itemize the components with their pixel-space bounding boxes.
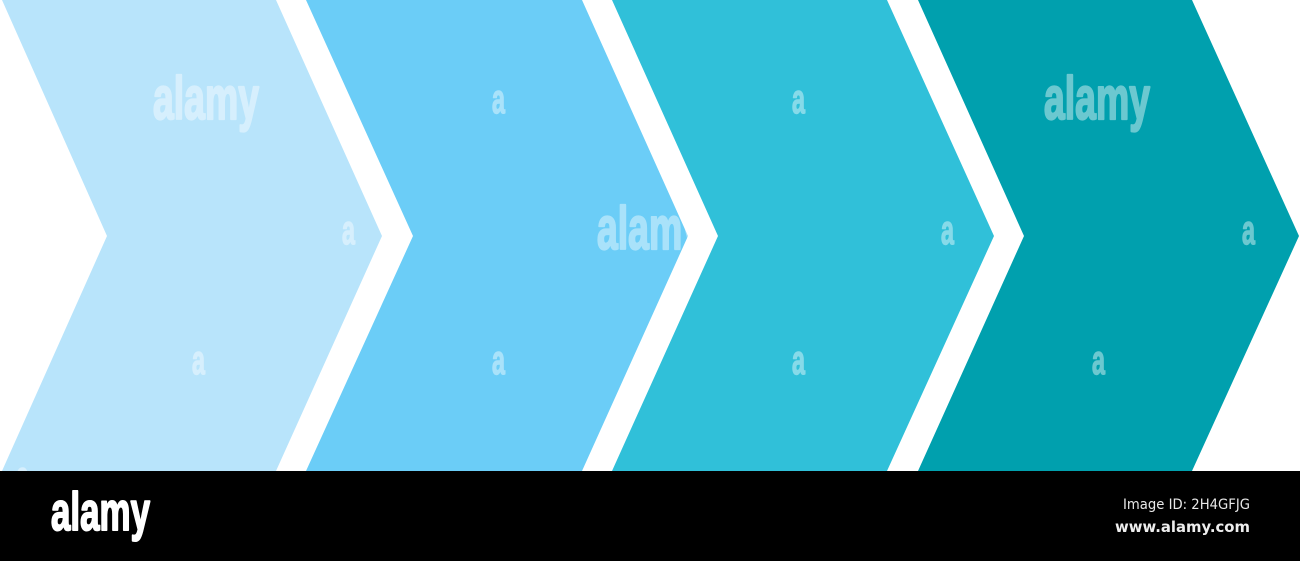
- watermark: small a, row 3: [192, 351, 1106, 376]
- watermark: small a, row 2: a: [941, 207, 955, 253]
- watermark: small a, row 2: [342, 221, 1256, 246]
- watermark: small a, row 1: a: [492, 76, 506, 122]
- image id: Image ID: 2H4GFJG: [1123, 497, 1250, 513]
- watermark: small a, row 2: a: [342, 207, 356, 253]
- chevron step 2: [306, 0, 688, 471]
- watermark: small a, row 1: [492, 90, 806, 114]
- watermark: small a, row 1: a: [792, 76, 806, 122]
- chevron step 1: [2, 0, 382, 471]
- watermark: small a, row 3: a: [192, 337, 206, 383]
- chevron step 4: [918, 0, 1299, 471]
- chevron step 3: [612, 0, 994, 471]
- footer bar: [0, 471, 1300, 561]
- watermark: small a, row 3: a: [792, 337, 806, 383]
- watermark: clipped a at lower edge: a: [16, 453, 30, 499]
- watermark: small a, row 3: a: [1092, 337, 1106, 383]
- watermark: alamy top left: alamy: [153, 65, 259, 132]
- watermark: small a, row 3: a: [492, 337, 506, 383]
- watermark: alamy clipped at chevron 2 tip: alamy: [597, 195, 703, 262]
- website: www.alamy.com: [1115, 518, 1250, 536]
- watermark: alamy top right: alamy: [1044, 65, 1150, 132]
- watermarks: [16, 65, 1256, 499]
- footer logo: alamy: [51, 482, 150, 542]
- watermark: small a, row 2: a: [1242, 207, 1256, 253]
